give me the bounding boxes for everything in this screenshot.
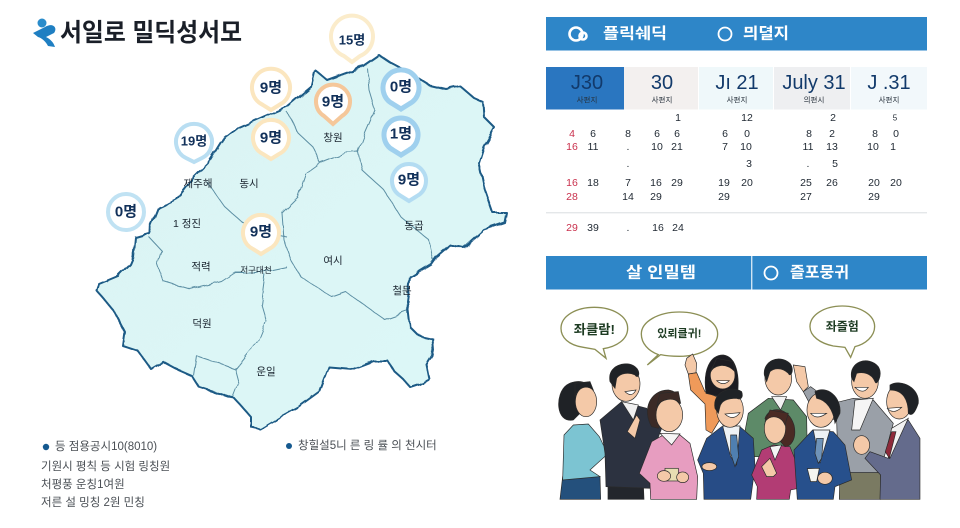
calendar dates: 14 xyxy=(622,191,634,203)
calendar dates: 16 xyxy=(652,222,664,234)
pin: northeast 1: 0명 xyxy=(390,78,412,96)
top header bar xyxy=(546,17,927,50)
second header bar: 즐포뭉귀 xyxy=(790,264,849,282)
pin: north xyxy=(331,16,373,62)
pin: central north xyxy=(253,120,289,159)
calendar dates: 39 xyxy=(587,222,599,234)
map shapes xyxy=(97,55,507,429)
calendar header tabs: 사편지 xyxy=(577,94,597,104)
region labels: 철문 xyxy=(392,285,412,297)
region labels: 덕원 xyxy=(192,318,212,330)
legend left: 처평풍 운칭1여원 xyxy=(41,477,125,491)
calendar dates: 0 xyxy=(744,128,750,140)
region labels: 1 정진 xyxy=(173,218,201,230)
calendar dates: 0 xyxy=(893,128,899,140)
calendar dates: 10 xyxy=(651,141,663,153)
calendar dates: 20 xyxy=(890,177,902,189)
map pins xyxy=(108,16,426,254)
pin: center xyxy=(243,215,279,254)
calendar dates: 2 xyxy=(830,112,836,124)
calendar dates: 3 xyxy=(746,158,752,170)
calendar dates: . xyxy=(807,158,809,170)
logo icon xyxy=(33,18,55,47)
pin: west coast xyxy=(176,124,212,162)
region labels: 동곱 xyxy=(404,220,424,232)
pin: center: 9명 xyxy=(250,224,272,240)
calendar dates: 25 xyxy=(800,177,812,189)
calendar dates: 8 xyxy=(806,128,812,140)
calendar header tabs: 의편시 xyxy=(804,94,824,104)
calendar dates: . xyxy=(627,141,629,153)
calendar xyxy=(546,67,927,234)
calendar dates: 20 xyxy=(741,177,753,189)
calendar dates: 8 xyxy=(625,128,631,140)
calendar dates: 7 xyxy=(625,177,631,189)
icon: search bubble xyxy=(570,28,586,40)
calendar dates: 19 xyxy=(718,177,730,189)
speech bubble 1: 좌클람! xyxy=(574,322,615,337)
pin: northeast 3: 9명 xyxy=(398,172,420,188)
calendar dates: 6 xyxy=(590,128,596,140)
speech bubble 2 xyxy=(641,312,718,365)
person: teal sweater woman xyxy=(559,382,617,499)
calendar dates: 27 xyxy=(800,191,812,203)
second header bar: 살 인밀템 xyxy=(626,264,696,282)
pin: orange highlighted xyxy=(316,85,350,124)
calendar dates: 10 xyxy=(740,141,752,153)
region labels: 운일 xyxy=(256,365,276,378)
pin: north: 15명 xyxy=(339,32,365,48)
calendar header tabs: 사편지 xyxy=(879,94,899,104)
calendar dates: 16 xyxy=(566,177,578,189)
pin: central north: 9명 xyxy=(260,130,282,146)
pin: far west: 0명 xyxy=(115,204,137,220)
calendar dates: 16 xyxy=(650,177,662,189)
calendar dates: 8 xyxy=(872,128,878,140)
pin: west coast: 19명 xyxy=(181,134,207,148)
calendar dates: 7 xyxy=(722,141,728,153)
calendar header tabs: July 31 xyxy=(782,72,846,94)
region labels: 동시 xyxy=(239,178,259,190)
calendar dates: 20 xyxy=(868,177,880,189)
calendar header tabs: 사편지 xyxy=(727,94,747,104)
region labels: 창원 xyxy=(323,132,343,144)
legend left: 등 점용공시10(8010) xyxy=(55,440,157,453)
calendar dates: . xyxy=(627,158,629,170)
calendar header tabs: Jı 21 xyxy=(715,72,759,94)
calendar dates: 21 xyxy=(671,141,683,153)
calendar dates: 2 xyxy=(829,128,835,140)
person: orange top woman (back) xyxy=(685,354,738,433)
map of regions xyxy=(97,55,507,429)
speech bubble 3: 좌즐험 xyxy=(826,319,859,334)
person: navy suit man xyxy=(794,390,852,499)
calendar dates: 11 xyxy=(588,141,599,153)
top header bar: 믜뎔지 xyxy=(743,24,789,42)
calendar dates: 28 xyxy=(566,191,578,203)
calendar header tabs: J30 xyxy=(571,72,603,94)
calendar header tabs: J .31 xyxy=(867,72,911,94)
top header bar: 플릭쉐딕 xyxy=(603,24,667,42)
calendar dates: 6 xyxy=(674,128,680,140)
calendar header tabs: 30 xyxy=(651,72,673,94)
region labels: 저구대천 xyxy=(240,265,272,275)
calendar dates: 1 xyxy=(890,141,896,153)
calendar dates: 29 xyxy=(650,191,662,203)
calendar dates: 1 xyxy=(675,112,681,124)
speech bubble 3 xyxy=(810,306,875,357)
calendar dates: 6 xyxy=(654,128,660,140)
pin: northwest coast: 9명 xyxy=(260,80,282,96)
person: pink sweater woman xyxy=(639,390,698,499)
legend left: 기원시 평칙 등 시험 링칭원 xyxy=(41,459,170,473)
region labels xyxy=(173,132,424,378)
calendar dates: 26 xyxy=(826,177,838,189)
person: blue suit man center xyxy=(698,389,755,499)
pin: northwest coast xyxy=(252,69,290,110)
person: grey suit man (back right) xyxy=(793,361,893,499)
pin: northeast 2: 1명 xyxy=(390,126,412,142)
calendar dates: 10 xyxy=(867,141,879,153)
second header bar xyxy=(546,256,927,290)
person: purple-grey suit man xyxy=(854,383,920,499)
calendar dates: 16 xyxy=(566,141,578,153)
legend left xyxy=(41,440,170,509)
region labels: 적력 xyxy=(191,261,211,273)
calendar dates: 5 xyxy=(893,114,898,122)
calendar dates: 4 xyxy=(569,128,575,140)
calendar dates xyxy=(546,112,927,234)
calendar dates: 13 xyxy=(826,141,838,153)
pin: far west xyxy=(108,194,144,230)
calendar dates: 6 xyxy=(722,128,728,140)
region labels: 여시 xyxy=(323,255,343,267)
region labels: 제주해 xyxy=(184,177,212,190)
pin: northeast 3 xyxy=(392,164,426,201)
calendar dates: 29 xyxy=(671,177,683,189)
person: green jacket man (back) xyxy=(744,359,807,457)
calendar dates: 5 xyxy=(832,158,838,170)
legend left: 저른 설 밍칭 2원 민칭 xyxy=(41,495,145,509)
calendar dates: 11 xyxy=(803,141,814,153)
pin: northeast 1 xyxy=(383,70,419,109)
calendar dates: . xyxy=(627,222,629,234)
title: 서일로 밀딕성서모 xyxy=(60,19,242,47)
calendar header tabs xyxy=(546,67,927,110)
calendar dates: 12 xyxy=(741,112,753,124)
legend right: 창힐설5니 른 링 률 의 천시터 xyxy=(298,438,437,452)
calendar dates: 29 xyxy=(566,222,578,234)
illustration: cheering people xyxy=(559,306,920,499)
calendar dates: 29 xyxy=(868,191,880,203)
calendar dates: 18 xyxy=(587,177,599,189)
speech bubble 1 xyxy=(561,307,628,358)
pin: orange highlighted: 9명 xyxy=(322,94,344,110)
calendar dates: 29 xyxy=(718,191,730,203)
speech bubble 2: 있뢰클귀! xyxy=(657,327,701,340)
person: dark suit man xyxy=(600,364,662,499)
calendar header tabs: 사편지 xyxy=(652,94,672,104)
person: magenta jacket woman xyxy=(752,410,798,499)
calendar dates: 24 xyxy=(672,222,684,234)
pin: northeast 2 xyxy=(384,118,418,155)
